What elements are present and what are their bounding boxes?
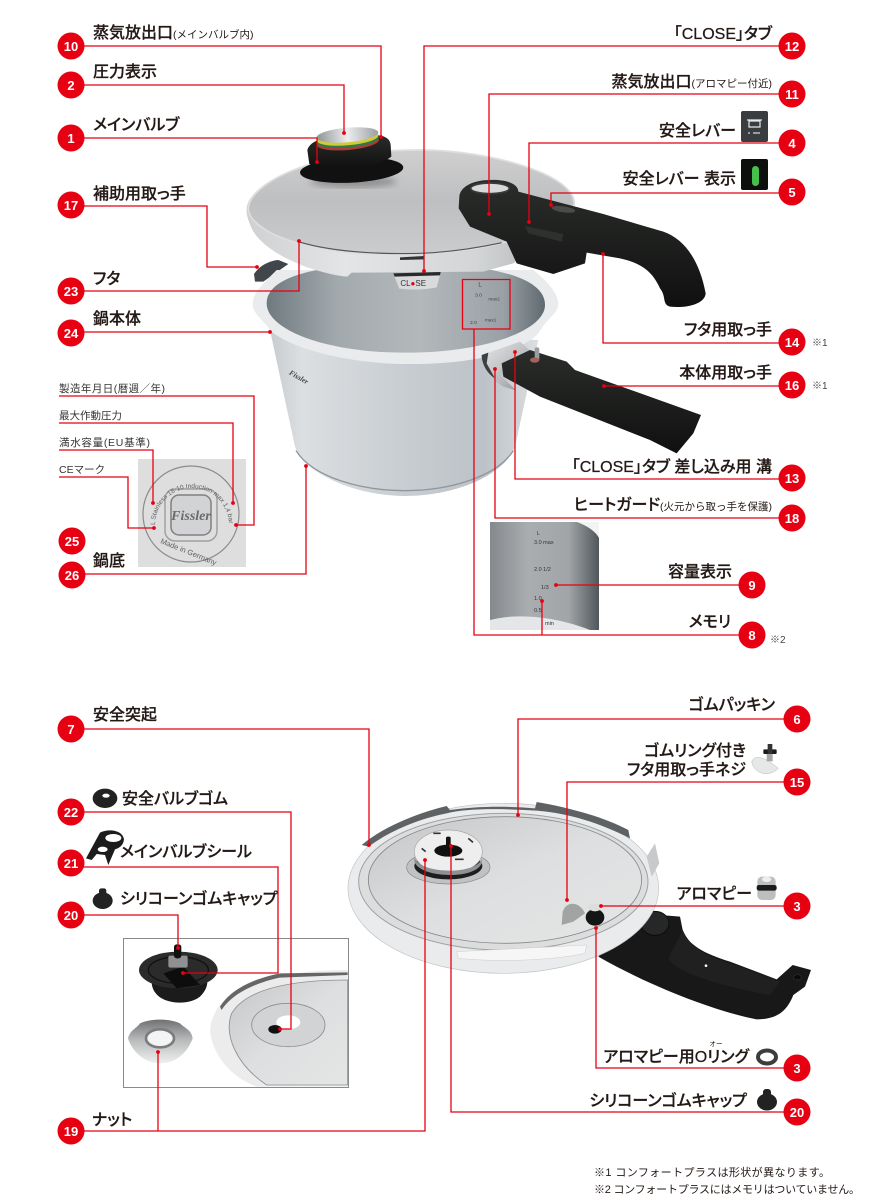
icon: safety lever (741, 111, 768, 142)
heat guard bracket (482, 342, 534, 391)
number badges: 15 (790, 775, 804, 790)
part labels: フタ用取っ手ネジ (627, 761, 746, 779)
capacity scale inside pot: 2.0 (470, 320, 477, 326)
pot interior (267, 263, 545, 353)
lid close-up (210, 970, 348, 1087)
part labels: 「CLOSE」タブ 差し込み用 溝 (572, 457, 772, 476)
icon: aroma valve O-ring (758, 1050, 776, 1064)
footnotes (594, 1165, 860, 1196)
photo: base stamp of the pot: Fissler (170, 509, 211, 524)
number badges: 2 (67, 78, 75, 93)
part labels: メモリ (689, 614, 731, 631)
number badges: 21 (64, 856, 78, 871)
icon: rubber ring screw (752, 744, 778, 774)
aroma valve (562, 904, 585, 925)
part labels: ヒートガード(火元から取っ手を保護) (574, 496, 772, 514)
number badges: 19 (64, 1124, 78, 1139)
number badges: 23 (64, 284, 78, 299)
photo: capacity marks (490, 522, 599, 630)
capacity scale inside pot: max2 (488, 297, 500, 302)
close tab (393, 273, 441, 290)
part labels: 蒸気放出口(メインバルブ内) (93, 24, 254, 42)
lid latch (647, 843, 659, 877)
icon: aroma valve part (757, 877, 777, 900)
logo on body: Fissler (288, 368, 310, 386)
number badges: 10 (64, 39, 78, 54)
lid dome (248, 150, 574, 254)
photo: capacity marks: 1/3 (541, 585, 549, 591)
number badges: 22 (64, 805, 78, 820)
photo: capacity marks: 3.0 max (534, 540, 554, 546)
part labels: 鍋底 (93, 552, 125, 570)
panel: lid underside photo (86, 744, 811, 1110)
panel: assembled pressure cooker photo (138, 111, 806, 644)
part labels: ※1 (812, 381, 828, 392)
part labels: 安全レバー (659, 122, 736, 140)
part labels: ゴムリング付き (644, 741, 746, 760)
pot handle (502, 350, 701, 453)
pot rim (253, 270, 558, 364)
part labels: アロマピー用Oリング (603, 1048, 750, 1066)
central valve (407, 851, 490, 884)
number badges: 20 (64, 908, 78, 923)
photo: capacity marks: 0.5 (534, 608, 542, 614)
icon: silicone cap part (757, 1089, 777, 1110)
number badges: 13 (785, 471, 799, 486)
illustration: pot body with knob, lid and handles (247, 125, 706, 496)
capacity scale inside pot (470, 283, 500, 326)
part labels: 製造年月日(暦週／年) (59, 382, 165, 395)
part labels: 安全バルブゴム (122, 789, 229, 808)
footnotes: ※1 コンフォートプラスは形状が異なります。 (594, 1165, 830, 1179)
part labels: メインバルブシール (120, 842, 252, 861)
part labels: 鍋本体 (93, 310, 141, 328)
part labels: 安全突起 (93, 706, 157, 724)
number badges: 4 (788, 136, 796, 151)
photo: capacity marks: 2.0 1/2 (534, 567, 551, 573)
part labels: 本体用取っ手 (679, 364, 772, 382)
photo: exploded main valve (124, 938, 348, 1088)
pot outer body (270, 330, 538, 496)
part labels: 蒸気放出口(アロマピー付近) (611, 73, 772, 91)
part labels: 補助用取っ手 (93, 185, 186, 203)
part labels: ※1 (812, 338, 828, 349)
number badges: 3 (793, 899, 801, 914)
icon: safety valve rubber (93, 789, 117, 808)
part labels: 圧力表示 (93, 63, 157, 81)
illustration: lid underside (348, 802, 659, 973)
number badges: 18 (785, 511, 799, 526)
number badges: 20 (790, 1105, 804, 1120)
knob shadow (310, 176, 397, 188)
icon: safety lever indicator (741, 159, 768, 190)
part labels: フタ (93, 270, 121, 288)
part labels: ナット (92, 1112, 132, 1129)
photo: capacity marks: min (545, 621, 554, 627)
icon: silicone rubber cap (93, 888, 113, 909)
illustration: pot body with knob, lid and handles: CL●SE (400, 279, 426, 288)
valve seal assembly (152, 982, 207, 1003)
pot side handle (254, 260, 288, 282)
photo: base stamp of the pot: L Stainless 18-10 Induction max 1,4 bar (150, 483, 232, 524)
number badges: 6 (793, 712, 801, 727)
part labels: ゴムパッキン (689, 695, 775, 714)
part labels: 「CLOSE」タブ (674, 24, 773, 43)
part labels: フタ用取っ手 (684, 321, 772, 339)
number badges: 12 (785, 39, 799, 54)
part labels: メインバルブ (93, 115, 180, 134)
number badges: 26 (65, 568, 79, 583)
part labels: ※2 (770, 635, 786, 646)
part labels: CEマーク (59, 464, 105, 476)
number badges: 17 (64, 198, 78, 213)
part labels: シリコーンゴムキャップ (589, 1091, 747, 1110)
illustration: lid handle underside (598, 905, 811, 1019)
number badges: 8 (748, 628, 756, 643)
photo: capacity marks: L (537, 531, 540, 537)
leader dots (151, 131, 606, 1054)
part labels: 満水容量(EU基準) (59, 436, 150, 449)
lid rim (247, 150, 575, 277)
part labels: シリコーンゴムキャップ (120, 889, 278, 908)
number badges: 14 (785, 335, 800, 350)
number badges: 11 (785, 87, 799, 102)
leader lines (59, 46, 797, 1131)
photo: capacity marks: 1.0 (534, 596, 542, 602)
footnotes: ※2 コンフォートプラスにはメモリはついていません。 (594, 1183, 860, 1196)
capacity scale inside pot: L (478, 283, 482, 289)
part labels: 安全レバー 表示 (623, 170, 736, 188)
part labels: 最大作動圧力 (59, 409, 122, 422)
photo: base stamp of the pot: Made in Germany (159, 537, 218, 567)
number badges: 16 (785, 378, 799, 393)
capacity scale inside pot: max1 (485, 318, 497, 323)
icon: main valve seal (86, 830, 124, 865)
number badges: 5 (788, 185, 796, 200)
main valve knob (299, 155, 404, 185)
number badges: 25 (65, 534, 79, 549)
part labels: オー (710, 1040, 722, 1048)
number badges: 9 (748, 578, 756, 593)
photo: base stamp of the pot (138, 459, 246, 567)
number badges: 24 (64, 326, 79, 341)
number badges: 7 (67, 722, 75, 737)
capacity scale inside pot: 3.0 (475, 293, 482, 299)
nut (128, 1020, 193, 1063)
number badges: 1 (67, 131, 75, 146)
lid outer ring (348, 803, 659, 973)
part labels: アロマピー (677, 885, 752, 903)
part labels: 容量表示 (668, 563, 732, 581)
lid handle (459, 180, 706, 307)
number badges: 3 (793, 1061, 801, 1076)
